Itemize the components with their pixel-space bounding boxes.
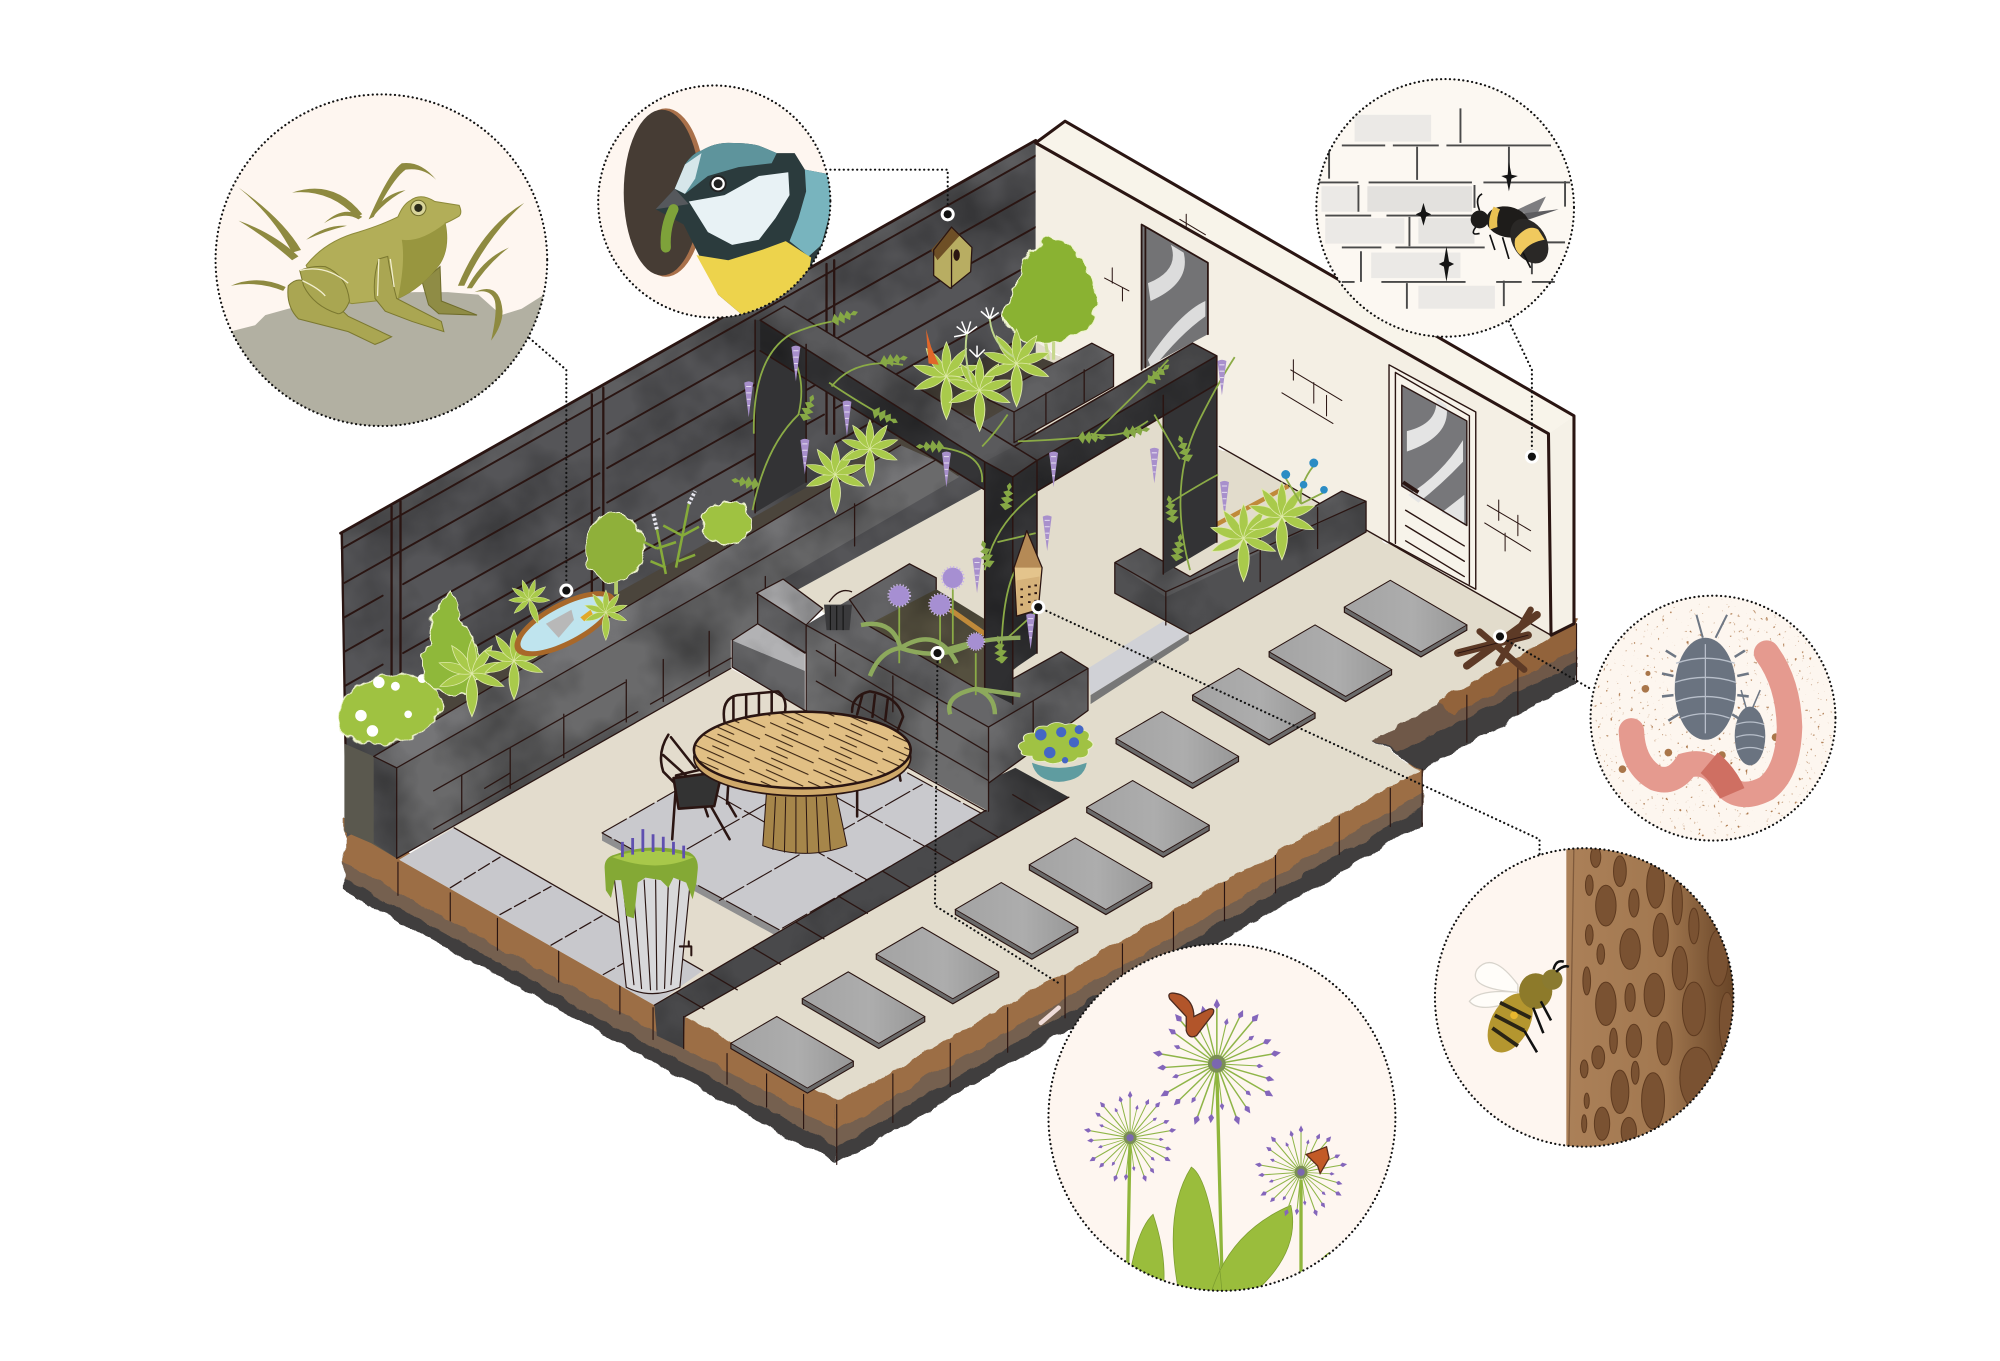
soil section [344,617,1577,1165]
insect hotel [1014,531,1042,616]
soil cracks [398,624,1577,1165]
toad: far front leg [422,267,477,315]
circle: toad [204,94,561,440]
bone in soil [1041,1008,1059,1023]
toad: body [306,197,461,304]
stepping stones [731,580,1467,1093]
blue tit: caterpillar [666,209,673,247]
table pedestal [763,791,847,853]
wall: top and end [1036,121,1574,434]
ground [685,342,1554,1102]
patio: edge slab strip [399,828,703,1005]
circle: blue tit [598,85,832,318]
soil crumbs [1619,671,1779,794]
soil: front-right face [837,755,1422,1165]
door [1389,365,1476,589]
chair: front left [661,735,736,839]
plants in left bed [330,420,899,754]
window [1142,225,1208,370]
toad: ground [232,292,543,426]
toad: eye [411,200,426,216]
toad: hind leg [288,280,392,344]
connector markers [559,207,1539,660]
circle: bee at insect hotel [1435,842,1745,1154]
circle: alliums and butterflies [1048,944,1395,1291]
fence [341,140,1036,837]
toad: thigh [300,266,349,314]
tree-like shrub [1004,235,1097,360]
bee: insect [1469,961,1569,1060]
bed: central L planter [806,589,1088,811]
water butt: moss [605,848,698,918]
allium planting [861,567,1020,714]
toad: grass [231,163,524,341]
pergola: second beam [1014,343,1217,460]
bumblebee: insect [1471,194,1559,270]
toad: near front leg [374,256,444,332]
soil speckle texture [1593,598,1833,838]
pergola: rear post [755,320,806,513]
red hot poker [926,329,939,365]
illustration: isometric wildlife garden [214,78,1836,1292]
pergola [755,306,1217,704]
circle: bumblebee on brick [1316,79,1574,337]
bee: bored wood [1566,848,1734,1147]
connector lines [529,170,1591,985]
fence planks and posts [341,140,1036,832]
blue tit: bird [656,143,832,315]
table top [694,712,911,796]
herb with white spikes [644,491,699,574]
water butt [605,829,698,994]
bird box [931,227,972,288]
wisteria vines [730,306,1235,664]
allium: left flower head [1079,1089,1180,1189]
plants in right planter [1209,459,1328,581]
bumblebee: mortar lines [1319,108,1570,309]
vine foliage [730,306,1195,664]
wall brick marks [1105,214,1531,551]
rear wall [1036,121,1574,635]
allium: right flower head [1250,1123,1351,1223]
pergola: right post [1163,364,1217,574]
bumblebee: mortar holes [1416,162,1518,282]
white seed heads [954,307,1014,383]
worm [1631,653,1790,794]
palm leaves [438,639,506,717]
wall: face [1036,143,1551,635]
tall shrub [423,593,480,696]
allium: leaves [1128,1167,1339,1291]
circle: woodlice and worm [1591,596,1835,841]
soil: front-left face [344,816,837,1165]
chairs and table [661,691,911,853]
butterfly: upper [1169,993,1214,1037]
pond [503,573,625,669]
pot with blue flowers [1018,723,1093,782]
small woodlouse [1735,690,1765,765]
patio: cream floor [399,668,985,1005]
dark channel edging [654,768,1069,1048]
lantern [824,591,852,630]
pergola: first beam [760,320,985,490]
soil: rear-right face [1365,617,1577,770]
log pile [1458,610,1537,670]
patio: table slabs [602,717,982,930]
low shrub [703,500,751,546]
chair: rear right [852,691,903,816]
bed: side pillar [344,744,397,858]
allium: stems [1128,1071,1301,1276]
palms [912,342,981,419]
allium: large flower head [1146,995,1286,1135]
raised beds [344,343,1366,858]
palm leaves by rear post [805,444,866,513]
patio [399,668,985,1005]
toad: belly shade [398,223,447,298]
blue tit: nest hole [626,108,705,277]
ground: cream gravel [685,342,1554,1102]
chair: rear left [724,691,785,722]
wisteria flowers [744,346,1229,649]
bed: front wall [374,445,959,858]
round shrub [585,514,644,594]
leaves at pond edge [584,590,628,640]
plants in back planter [912,235,1097,431]
bed: steps [732,564,936,710]
pergola: front post [985,462,1013,704]
slab path by planter [1088,621,1189,704]
water butt: tap [680,941,691,955]
bumblebee: brick shading [1321,115,1495,309]
bed: back planter [912,343,1114,443]
big woodlouse [1662,615,1749,740]
channel joints [654,795,1069,1048]
bee: wood holes [1580,847,1735,1145]
shrub with white flowers [330,664,448,754]
water butt: lavender [622,829,684,858]
blue flowers [1281,459,1328,504]
bed soil behind wall [376,415,1008,765]
bed: right planter [1115,491,1366,634]
butterfly: lower [1306,1147,1329,1173]
